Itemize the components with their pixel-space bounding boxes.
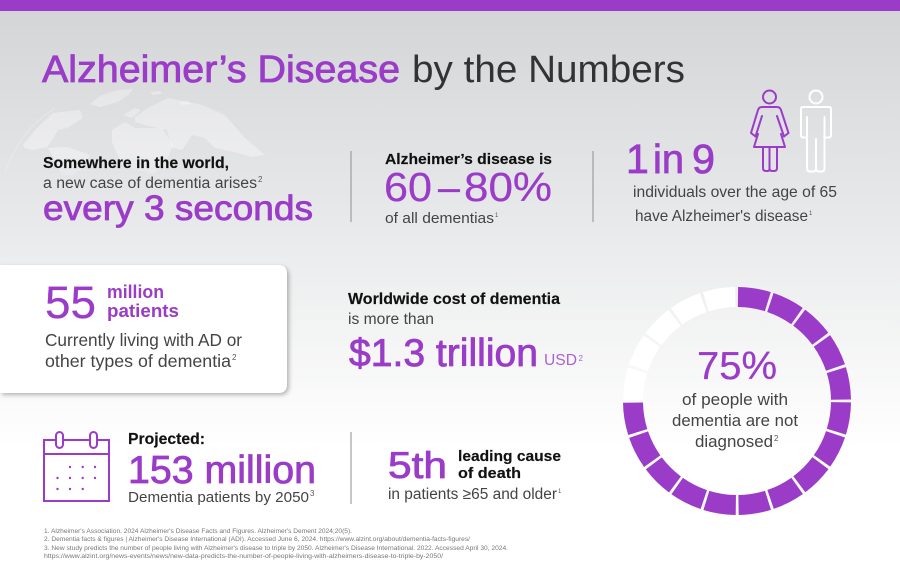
stat: 153 million	[128, 431, 316, 506]
stat: 5th leading cause: in patients ≥65 and older	[388, 486, 557, 503]
panel: 55 million patients: million	[107, 282, 164, 302]
stat: every 3 seconds: Somewhere in the world,	[43, 155, 229, 172]
stat: every 3 seconds: every 3 seconds	[43, 189, 313, 228]
stat: 1 in 9: have Alzheimer's disease	[635, 208, 808, 225]
panel: 55 million patients: patients	[107, 301, 179, 321]
stat: 5th leading cause: 5th	[388, 445, 447, 486]
stat: every 3 seconds	[43, 155, 313, 228]
stat: 60–80%	[384, 151, 552, 227]
stat: 5th leading cause: of death	[458, 465, 521, 482]
stat: 1 in 9: 1	[626, 136, 649, 182]
footnotes: 1. Alzheimer's Association. 2024 Alzheimer's Disease Facts and Figures. Alzheimer's Dement 2024;20(5).	[44, 528, 352, 535]
footnotes	[44, 528, 508, 560]
stat: 153 million: 153 million	[128, 449, 316, 492]
stat: worldwide cost: 2	[578, 354, 584, 363]
chart: 75% donut: 75%	[697, 345, 777, 388]
footnotes: 2. Dementia facts & figures | Alzheimer's Disease International (ADI). Accessed June 6, 2024. https://www.alzint.org/about/dementia-facts-figures/	[44, 536, 470, 543]
stat: 153 million: 3	[310, 489, 315, 498]
panel: 55 million patients: 2	[232, 353, 237, 362]
footnotes: https://www.alzint.org/news-events/news/new-data-predicts-the-number-of-people-living-with-alzheimers-disease-to-triple-by-2050/	[44, 553, 443, 560]
stat: 1 in 9: individuals over the age of 65	[633, 184, 837, 201]
panel: 55 million patients	[0, 265, 287, 393]
stat: 1 in 9: 9	[692, 136, 715, 182]
stat: worldwide cost: $1.3 trillion	[349, 332, 538, 375]
icon: man	[801, 90, 831, 172]
title: by the Numbers	[412, 49, 685, 91]
title: Alzheimer’s Disease	[42, 49, 400, 91]
panel: 55 million patients: Currently living with AD or	[45, 330, 242, 350]
stat: 60–80%: 60	[384, 164, 432, 210]
footnotes: 3. New study predicts the number of people living with Alzheimer's disease to triple by 2050. Alzheimer's Disease International. 2022. Accessed April 30, 2024.	[44, 545, 508, 552]
icon: globe	[5, 89, 265, 175]
icon: calendar	[44, 432, 109, 501]
stat: 153 million: Projected:	[128, 431, 205, 448]
stat: 5th leading cause: 1	[558, 489, 562, 495]
stat: 153 million: Dementia patients by 2050	[128, 489, 309, 506]
stat: worldwide cost: USD	[544, 352, 577, 369]
panel: 55 million patients: other types of dementia	[45, 351, 231, 371]
chart: 75% donut: of people with	[682, 391, 788, 409]
chart: 75% donut: diagnosed	[695, 433, 773, 451]
stat: every 3 seconds: 2	[258, 175, 263, 184]
top bar	[0, 0, 900, 11]
stat: every 3 seconds: a new case of dementia arises	[43, 175, 257, 192]
stat: 1 in 9	[626, 136, 837, 225]
stat: worldwide cost: is more than	[348, 311, 434, 328]
stat: 5th leading cause: leading cause	[458, 448, 561, 465]
title	[42, 49, 685, 91]
stat: 60–80%: Alzheimer’s disease is	[385, 151, 552, 168]
stat: 60–80%: –	[438, 164, 460, 210]
chart: 75% donut	[632, 296, 842, 506]
chart: 75% donut: 2	[774, 434, 779, 443]
icon: woman	[751, 90, 788, 171]
stat: 60–80%: 80%	[464, 164, 552, 210]
stat: 60–80%: 1	[495, 213, 499, 219]
stat: 60–80%: of all dementias	[385, 210, 494, 227]
stat: worldwide cost	[348, 291, 584, 375]
stat: 5th leading cause	[388, 445, 562, 503]
stat: worldwide cost: Worldwide cost of dementia	[348, 291, 560, 308]
chart: 75% donut: dementia are not	[672, 412, 798, 430]
stat: 1 in 9: in	[653, 136, 684, 182]
stat: 1 in 9: 1	[809, 211, 813, 217]
panel: 55 million patients: 55	[45, 277, 96, 328]
